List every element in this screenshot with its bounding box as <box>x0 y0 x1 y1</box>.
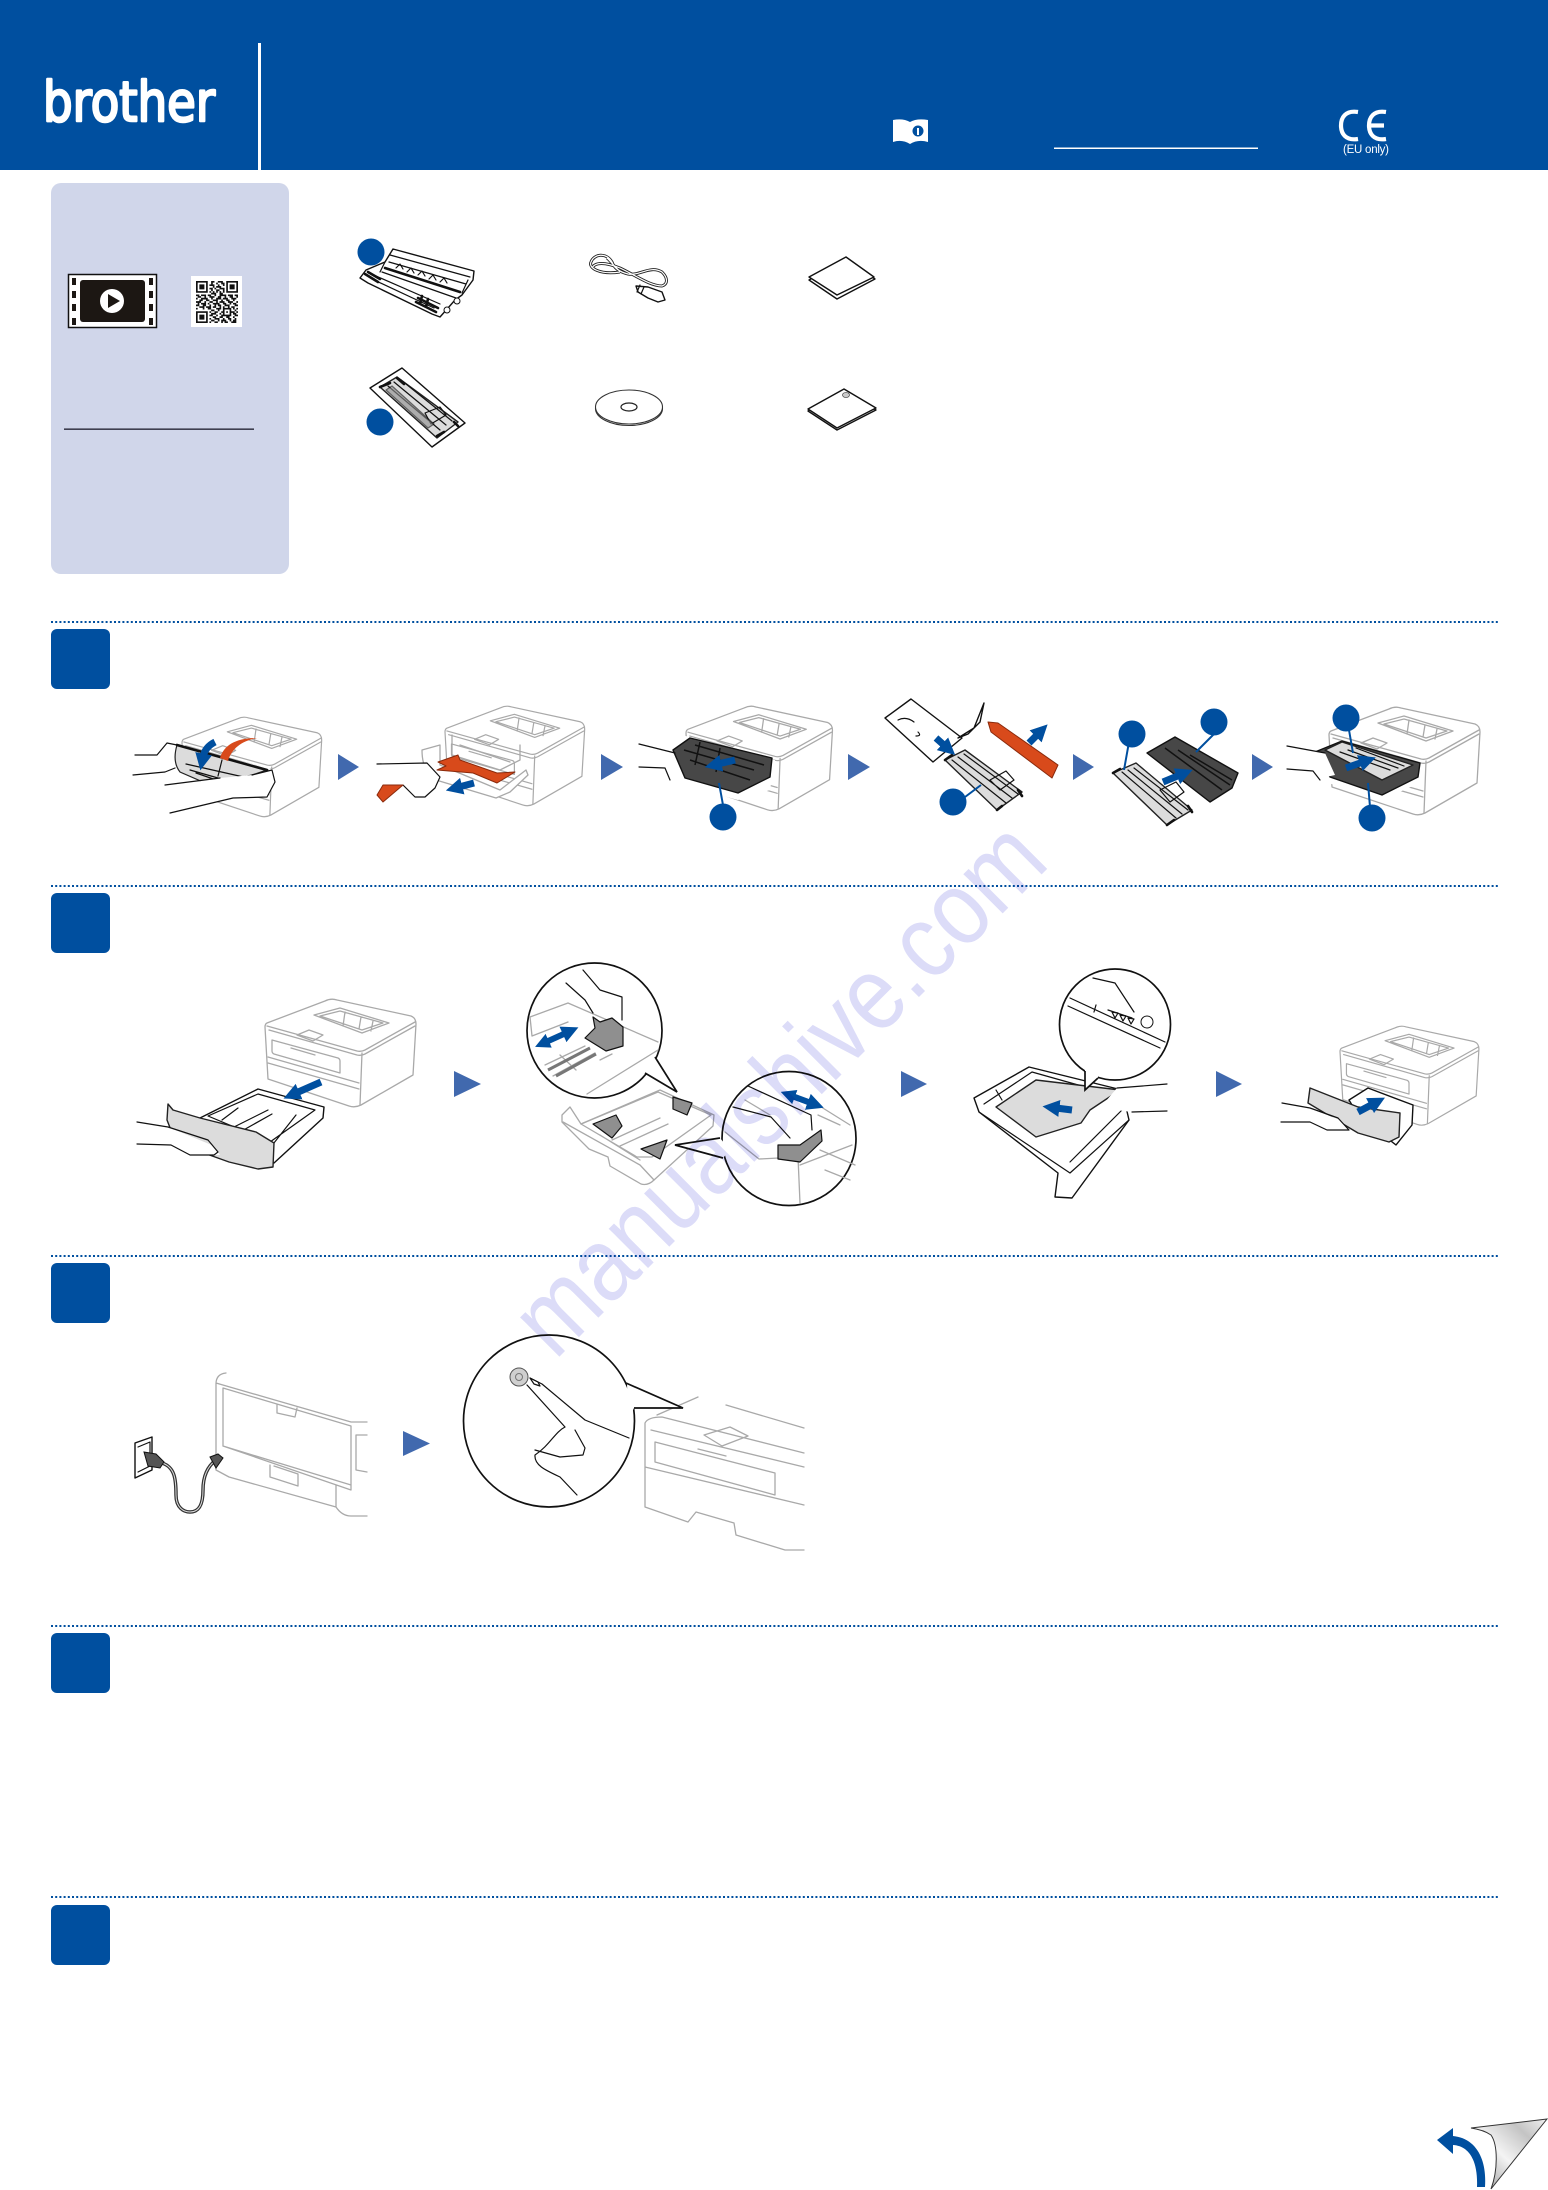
arrow <box>901 1071 927 1097</box>
scene: pull out paper tray <box>137 999 416 1169</box>
step number box 4 <box>51 1633 110 1693</box>
scene: opening the front cover <box>133 717 322 817</box>
item: leaflet <box>808 389 876 430</box>
item: CD-ROM <box>596 390 662 426</box>
step number box 3 <box>51 1263 110 1323</box>
scene: printer front cutaway <box>645 1397 804 1550</box>
arrow <box>403 1431 430 1456</box>
callout: paper max mark <box>1060 969 1170 1090</box>
scene: tray with guides <box>562 1090 714 1184</box>
scene: connect power cord <box>135 1373 367 1516</box>
arrow <box>848 754 870 780</box>
header band <box>0 0 1548 170</box>
callout: side paper guide <box>675 1072 856 1206</box>
arrow <box>1073 754 1094 780</box>
scene: inserting toner in drum <box>1113 708 1238 825</box>
item: power cord <box>591 255 666 302</box>
supplied items <box>358 238 876 447</box>
icon: back arrow <box>1437 2128 1485 2187</box>
brother logo: brother <box>43 70 215 134</box>
arrow <box>1216 1071 1242 1097</box>
CE mark <box>1341 112 1389 156</box>
step number box 2 <box>51 893 110 953</box>
step 3 illustrations <box>135 1335 804 1550</box>
step 2 illustrations <box>137 963 1479 1206</box>
scene: load paper <box>974 1067 1167 1198</box>
watermark: manualshive.com <box>489 798 1068 1377</box>
item: drum unit <box>358 238 474 317</box>
arrow <box>454 1071 481 1097</box>
scene: push tray back <box>1281 1026 1479 1145</box>
callout: power button <box>464 1335 683 1507</box>
CE mark: (EU only) <box>1343 144 1389 156</box>
step number box 1 <box>51 629 110 689</box>
icon: info book <box>893 119 928 144</box>
step divider dotted lines <box>51 622 1498 1897</box>
page curl corner <box>1471 2119 1547 2189</box>
scene: reinstalling assembly <box>1287 704 1480 832</box>
arrow <box>338 754 359 780</box>
step 1 illustrations <box>133 699 1480 832</box>
arrow <box>1252 754 1273 780</box>
item: booklet <box>809 257 875 299</box>
scene: pulling out drum <box>639 706 832 830</box>
item: toner in bag <box>366 368 465 447</box>
QR code <box>191 276 242 327</box>
arrow <box>601 754 623 780</box>
icon: video film <box>68 274 156 328</box>
scene: removing orange packing <box>377 706 585 806</box>
step number box 5 <box>51 1905 110 1965</box>
callout: rear paper guide <box>527 963 677 1098</box>
scene: unpacking toner <box>885 699 1058 816</box>
panel: video help <box>51 183 289 574</box>
